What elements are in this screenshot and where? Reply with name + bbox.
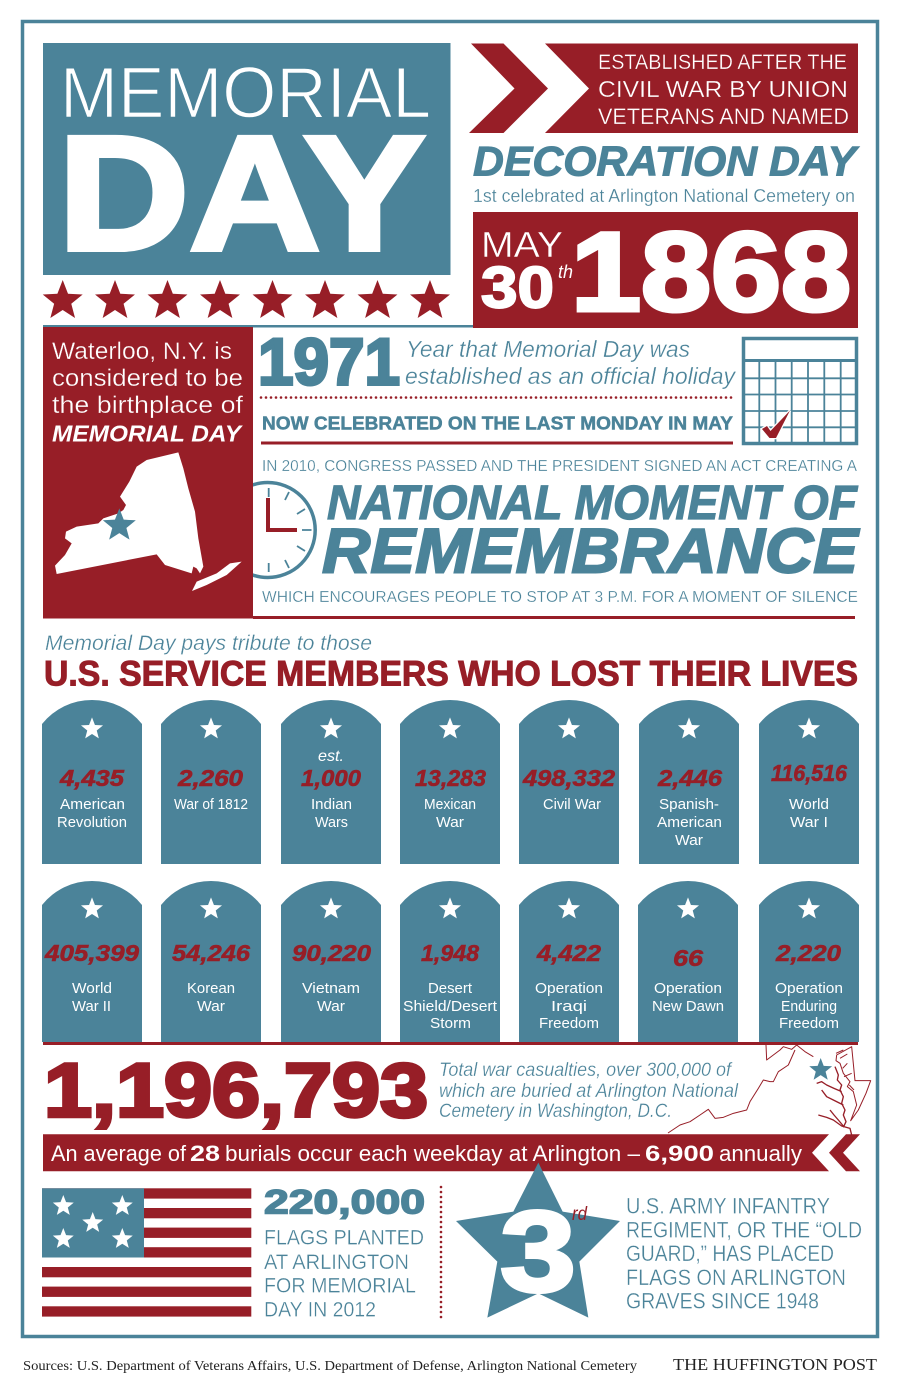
tombstone: World War II: War II <box>72 998 111 1015</box>
numeral 3: 3 <box>500 1188 576 1316</box>
red rule <box>43 1042 858 1045</box>
tombstone: Desert Shield/Desert Storm: Shield/Desert <box>403 998 498 1015</box>
tombstone: World War I: War I <box>790 814 828 831</box>
tombstone: Operation Iraqi Freedom: Iraqi <box>551 998 587 1015</box>
text: official holiday <box>405 336 736 389</box>
text: total war casualties: which are buried at Arlington National <box>439 1081 739 1102</box>
icon: American flag <box>42 1188 251 1317</box>
panel: chevron banner <box>469 44 858 133</box>
text: Old Guard: REGIMENT, OR THE “OLD <box>626 1217 862 1242</box>
map: Virginia and Maryland outline <box>668 1045 871 1135</box>
tombstone: Mexican War: 13,283 <box>415 765 486 791</box>
tombstone: American Revolution <box>42 700 142 864</box>
banner shape <box>545 44 858 133</box>
tombstone: Operation Enduring Freedom: Operation <box>775 980 843 997</box>
tombstone: Mexican War <box>400 700 500 864</box>
panel: Memorial Day title <box>43 43 450 284</box>
banner text <box>51 1141 802 1166</box>
text: Waterloo birthplace <box>52 338 244 446</box>
text: official holiday: Year that Memorial Day was <box>406 336 690 362</box>
text: moment of silence: WHICH ENCOURAGES PEOPLE TO STOP AT 3 P.M. FOR A MOMENT OF SILENCE <box>262 589 858 606</box>
text: Waterloo birthplace: the birthplace of <box>52 392 243 419</box>
tombstone: Spanish-American War: American <box>657 814 722 831</box>
tombstone: Operation Iraqi Freedom <box>519 881 619 1042</box>
tombstone: Operation Enduring Freedom: Freedom <box>779 1015 839 1032</box>
MAY: MAY <box>481 224 563 265</box>
tombstone: Vietnam War <box>281 881 381 1042</box>
tombstone: World War II <box>42 881 142 1042</box>
tombstone: Operation New Dawn: 66 <box>673 945 703 971</box>
arrow: chevron <box>469 44 548 133</box>
text: first celebrated: 1st celebrated at Arlington National Cemetery on <box>473 186 855 206</box>
red rule <box>261 442 733 444</box>
text: Old Guard: GUARD,” HAS PLACED <box>626 1241 834 1266</box>
tombstone: Operation Iraqi Freedom: Freedom <box>539 1015 599 1032</box>
tombstone: Indian Wars: 1,000 <box>301 765 361 791</box>
heading: Remembrance: REMEMBRANCE <box>322 516 860 586</box>
banner text: annually <box>719 1141 802 1166</box>
tombstone: World War I <box>759 700 859 864</box>
icon: calendar <box>743 338 857 444</box>
tombstone: Operation Iraqi Freedom: 4,422 <box>536 940 601 966</box>
text: total war casualties: Total war casualties, over 300,000 of <box>439 1060 733 1081</box>
tombstone: Civil War: Civil War <box>543 796 601 813</box>
icon: check mark <box>762 410 790 438</box>
text: Old Guard: GRAVES SINCE 1948 <box>626 1289 819 1314</box>
banner text: 6,900 <box>645 1141 714 1166</box>
text: total war casualties <box>439 1060 739 1122</box>
banner: burials <box>43 1134 860 1171</box>
heading: Decoration Day: DECORATION DAY <box>473 138 860 184</box>
arrow: left chevron <box>829 1134 860 1171</box>
divider rule <box>43 325 473 328</box>
star: Waterloo marker <box>103 508 136 540</box>
tombstone: Mexican War: Mexican <box>424 796 476 813</box>
tombstone: Operation New Dawn: New Dawn <box>652 998 724 1015</box>
tombstone: Spanish-American War: 2,446 <box>657 765 722 791</box>
tombstone: Spanish-American War <box>639 700 739 864</box>
heading: National Moment of: NATIONAL MOMENT OF <box>327 477 859 530</box>
rd: rd <box>572 1204 588 1225</box>
tombstone: War of 1812: War of 1812 <box>174 796 248 813</box>
tombstone: Desert Shield/Desert Storm <box>400 881 500 1042</box>
tombstone: American Revolution: 4,435 <box>59 765 125 791</box>
dotted rule <box>261 396 733 399</box>
tombstone: Korean War <box>161 881 261 1042</box>
title: MEMORIAL: MEMORIAL <box>60 54 431 134</box>
tombstone: Operation Enduring Freedom: 2,220 <box>775 940 841 966</box>
heading: service members: U.S. SERVICE MEMBERS WHO LOST THEIR LIVES <box>44 654 858 694</box>
text: sources: Sources: U.S. Department of Veterans Affairs, U.S. Department of Defense, Arlington National Cemetery <box>23 1359 637 1374</box>
tombstone: Civil War <box>519 700 619 864</box>
text: total war casualties: Cemetery in Washington, D.C. <box>439 1101 672 1122</box>
tombstone: World War II: 405,399 <box>44 940 139 966</box>
tombstone: Indian Wars: Indian <box>311 796 352 813</box>
row of eight stars <box>43 280 450 318</box>
tombstone: Korean War: Korean <box>187 980 235 997</box>
tombstone: Vietnam War: War <box>317 998 345 1015</box>
dotted divider <box>440 1187 442 1318</box>
tombstone: Operation Enduring Freedom: Enduring <box>781 998 837 1015</box>
text: pays tribute: Memorial Day pays tribute to those <box>45 632 372 655</box>
tombstone: Spanish-American War: War <box>675 832 703 849</box>
tombstone: Indian Wars <box>281 700 381 864</box>
banner text: 28 <box>190 1141 220 1166</box>
30: 30 <box>481 256 554 320</box>
text: The Huffington Post: THE HUFFINGTON POST <box>673 1355 878 1374</box>
big number: 220,000: 220,000 <box>264 1184 425 1222</box>
tombstone: World War II: World <box>72 980 112 997</box>
panel: May 30th 1868 <box>473 210 858 334</box>
banner text: CIVIL WAR BY UNION <box>598 76 848 102</box>
tombstone: Civil War: 498,332 <box>522 765 615 791</box>
banner text: ESTABLISHED AFTER THE <box>598 51 847 74</box>
text: Waterloo birthplace: considered to be <box>52 365 243 392</box>
tombstone: American Revolution: American <box>60 796 125 813</box>
text: last Monday in May: NOW CELEBRATED ON THE LAST MONDAY IN MAY <box>262 414 733 434</box>
th: th <box>558 262 573 282</box>
tombstone: Desert Shield/Desert Storm: Storm <box>430 1015 471 1032</box>
tombstone: Vietnam War: 90,220 <box>292 940 371 966</box>
tombstone: Operation Enduring Freedom <box>759 881 859 1042</box>
tombstone: War of 1812: 2,260 <box>177 765 243 791</box>
tombstone: Desert Shield/Desert Storm: 1,948 <box>421 940 479 966</box>
map: New York state <box>55 452 242 591</box>
tombstone: Desert Shield/Desert Storm: Desert <box>428 980 473 997</box>
red rule <box>253 616 855 619</box>
tombstone: Indian Wars: Wars <box>315 814 348 831</box>
text: Waterloo birthplace: Waterloo, N.Y. is <box>52 338 232 365</box>
tombstone: American Revolution: Revolution <box>57 814 127 831</box>
text: in 2010: IN 2010, CONGRESS PASSED AND THE PRESIDENT SIGNED AN ACT CREATING A <box>262 458 857 475</box>
text: Old Guard <box>626 1193 862 1314</box>
title: DAY: DAY <box>58 102 425 284</box>
text: official holiday: established as an official holiday <box>405 363 736 389</box>
tombstone: Mexican War: War <box>436 814 464 831</box>
banner text: VETERANS AND NAMED <box>598 104 849 129</box>
tombstone: Indian Wars: est. <box>318 748 344 765</box>
tombstone: Operation New Dawn: Operation <box>654 980 722 997</box>
tombstone: World War I: World <box>789 796 829 813</box>
tombstone: Operation Iraqi Freedom: Operation <box>535 980 603 997</box>
tombstone: Korean War: 54,246 <box>172 940 250 966</box>
text: Old Guard: FLAGS ON ARLINGTON <box>626 1265 846 1290</box>
tombstone: Operation New Dawn <box>638 881 738 1042</box>
text: 1971: 1971 <box>258 324 400 398</box>
text: flags planted: FLAGS PLANTED <box>264 1226 424 1249</box>
text: flags planted <box>264 1226 424 1321</box>
tombstone: Vietnam War: Vietnam <box>302 980 360 997</box>
text: Waterloo birthplace: MEMORIAL DAY <box>52 420 244 446</box>
1868: 1868 <box>571 210 851 334</box>
panel: Waterloo <box>43 327 253 618</box>
tombstone: World War I: 116,516 <box>771 760 847 786</box>
icon: clock <box>220 482 315 578</box>
text: flags planted: AT ARLINGTON <box>264 1251 409 1274</box>
tombstone: War of 1812 <box>161 700 261 864</box>
icon: 3rd regiment star <box>456 1163 620 1318</box>
banner text: burials occur each weekday at Arlington – <box>225 1141 641 1166</box>
big number: total casualties: 1,196,793 <box>44 1048 428 1134</box>
tombstone: Korean War: War <box>197 998 225 1015</box>
star: Arlington marker <box>809 1058 832 1080</box>
text: flags planted: FOR MEMORIAL <box>264 1275 416 1298</box>
banner text: An average of <box>51 1141 187 1166</box>
banner text <box>598 51 849 129</box>
text: flags planted: DAY IN 2012 <box>264 1298 376 1321</box>
text: Old Guard: U.S. ARMY INFANTRY <box>626 1193 830 1218</box>
tombstone: Spanish-American War: Spanish- <box>659 796 719 813</box>
